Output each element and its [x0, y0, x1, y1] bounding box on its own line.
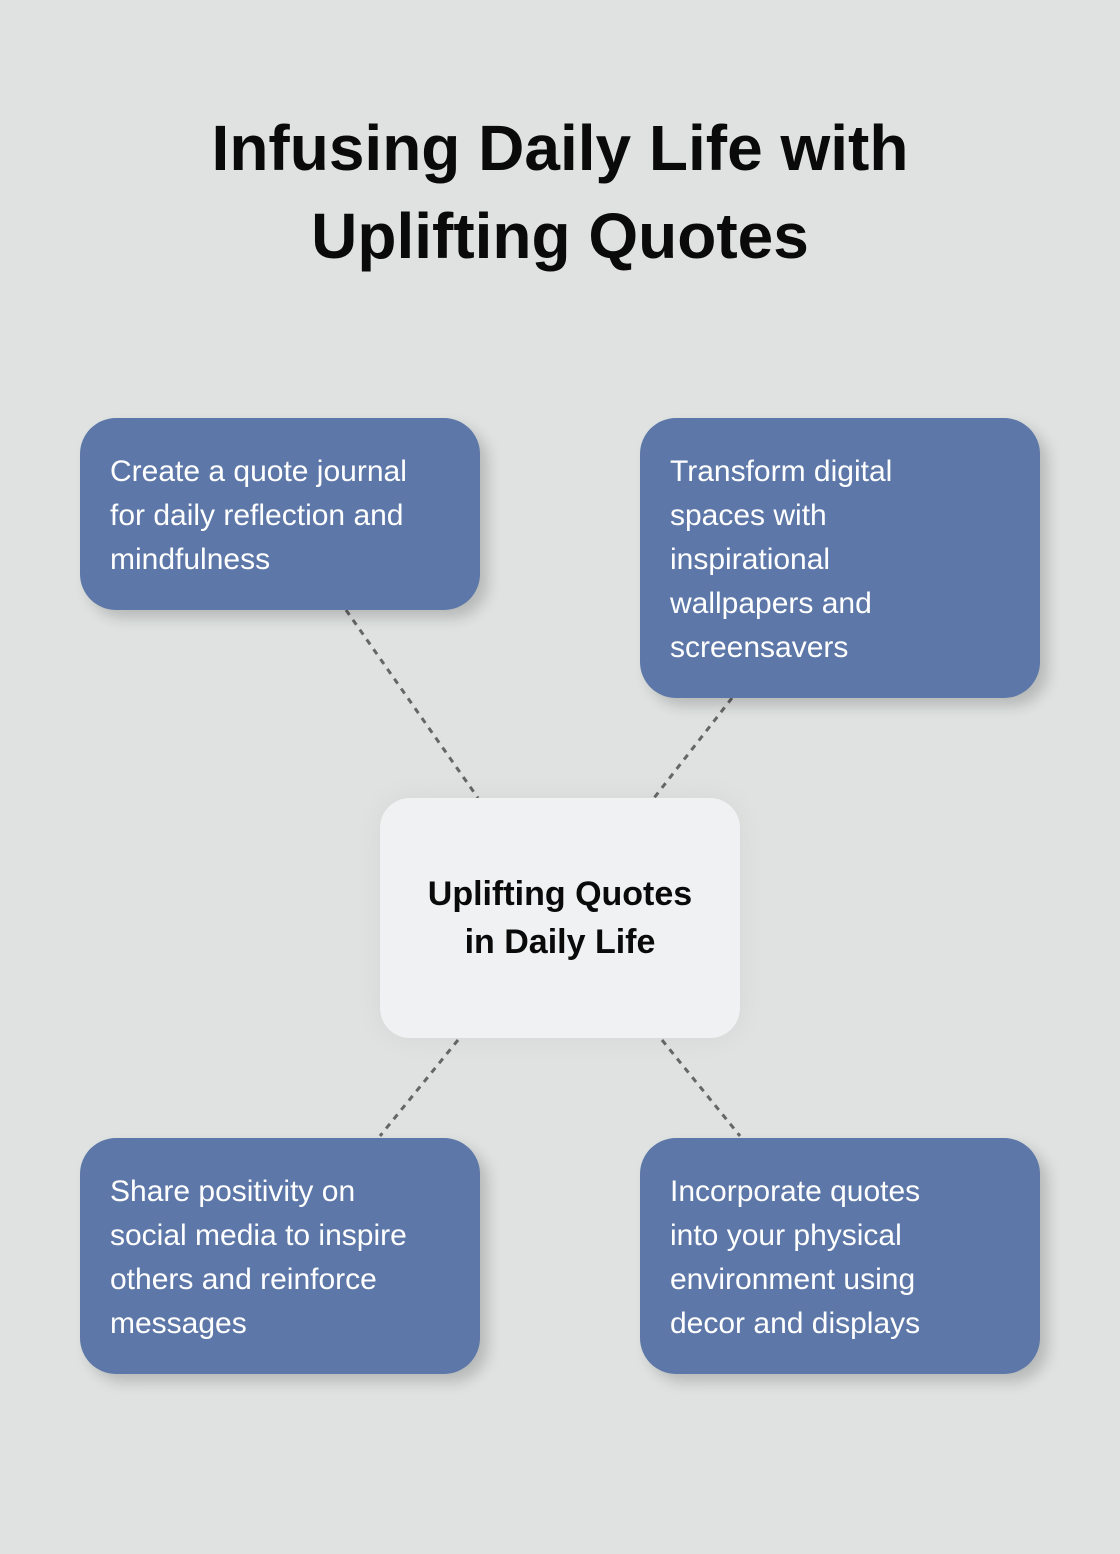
center node — [380, 798, 740, 1038]
box: quote journal — [80, 418, 480, 610]
box: physical environment: environment using — [670, 1263, 915, 1296]
box: digital spaces — [640, 418, 1040, 698]
box: physical environment: into your physical — [670, 1219, 902, 1252]
center node: Uplifting Quotes — [428, 875, 692, 913]
center node: in Daily Life — [465, 923, 655, 961]
box: social media — [80, 1138, 480, 1374]
box: digital spaces: inspirational — [670, 543, 830, 576]
box: quote journal: for daily reflection and — [110, 499, 404, 532]
box: digital spaces: screensavers — [670, 631, 848, 664]
box: social media: messages — [110, 1307, 247, 1340]
box: digital spaces: spaces with — [670, 499, 827, 532]
box: quote journal: mindfulness — [110, 543, 270, 576]
box: social media: others and reinforce — [110, 1263, 377, 1296]
box: digital spaces: wallpapers and — [670, 587, 872, 620]
box: physical environment — [640, 1138, 1040, 1374]
title — [212, 112, 908, 272]
box: physical environment: Incorporate quotes — [670, 1175, 920, 1208]
title: Infusing Daily Life with — [212, 112, 908, 184]
box: quote journal: Create a quote journal — [110, 455, 407, 488]
box: social media: Share positivity on — [110, 1175, 355, 1208]
box: physical environment: decor and displays — [670, 1307, 920, 1340]
box: digital spaces: Transform digital — [670, 455, 892, 488]
box: social media: social media to inspire — [110, 1219, 407, 1252]
title: Uplifting Quotes — [311, 200, 809, 272]
